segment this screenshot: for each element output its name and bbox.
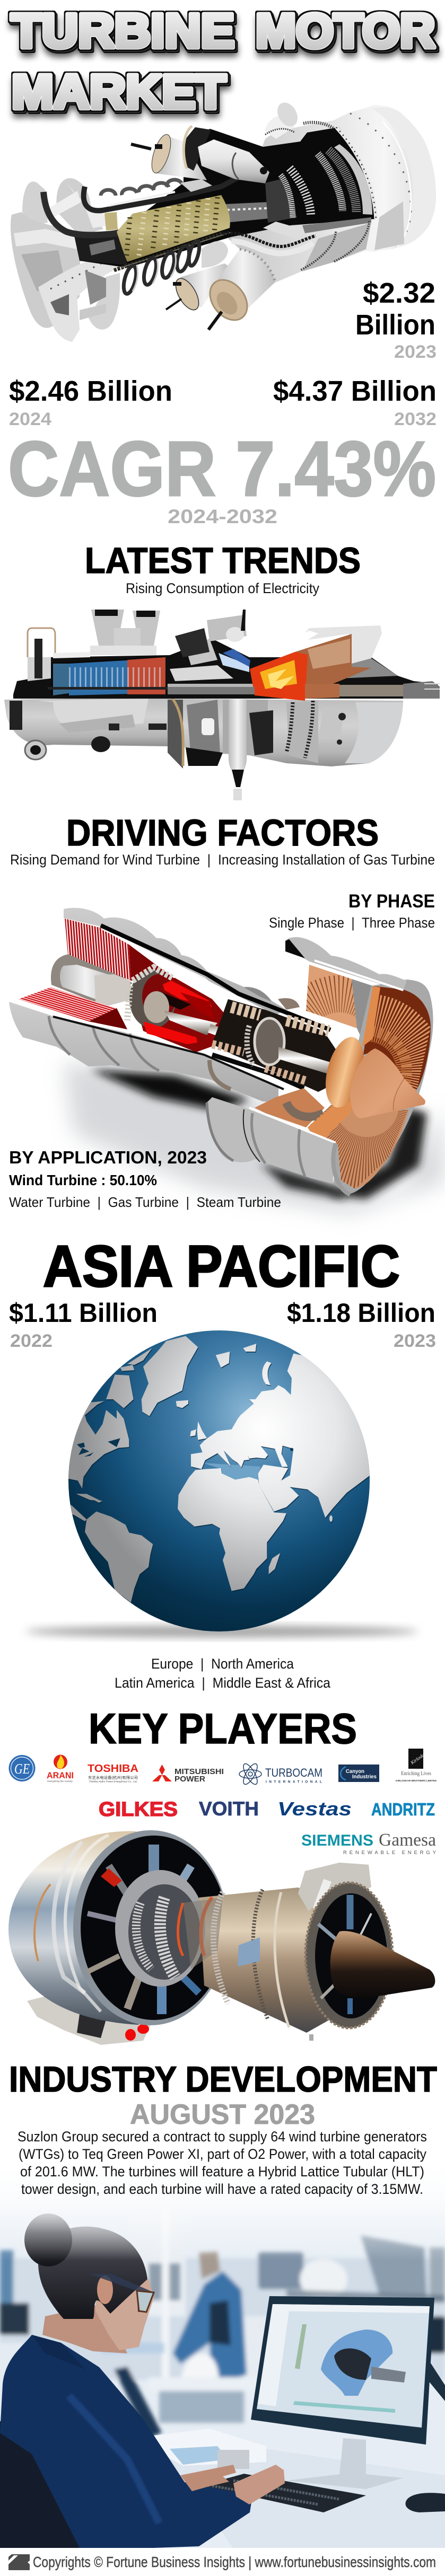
turbine stages [281, 150, 356, 218]
logo: Arani [47, 1754, 74, 1783]
icon: fortune logo [8, 2554, 30, 2570]
heading: asia pacific: ASIA PACIFIC [43, 1234, 400, 1299]
logo: Turbocam: INTERNATIONAL [266, 1780, 322, 1784]
inlet ducts [91, 610, 124, 646]
logo: Toshiba: Toshiba Hydro Power (Hangzhou) Co., Ltd. [89, 1780, 137, 1783]
right lower shell [207, 1097, 336, 1184]
top fade [0, 2165, 445, 2261]
hair [38, 2227, 147, 2319]
box and puck on desk [153, 2429, 266, 2466]
value: 2032: 2032 [394, 409, 437, 429]
bottom accessories [27, 1993, 151, 2045]
upper right shell [286, 937, 407, 991]
keyboard [202, 2474, 366, 2512]
upper combustor can [155, 136, 207, 180]
regions: Europe | North America [151, 1656, 294, 1672]
by application: Water Turbine | Gas Turbine | Steam Turbine [9, 1194, 281, 1210]
blue flame [219, 653, 249, 672]
value: 2022: $1.11 Billion [9, 1298, 158, 1328]
CAGR: 2024-2032 [168, 506, 277, 527]
value: 2024: 2024 [9, 409, 51, 429]
lower shell [9, 1002, 278, 1102]
by application [9, 1148, 281, 1210]
large combustor can [210, 249, 275, 309]
logo: Kirloskar: KIRLOSKAR BROTHERS LIMITED [396, 1779, 437, 1782]
second rotor stages [212, 999, 339, 1092]
shaft [168, 687, 255, 694]
value: 2023: 2023 [394, 1331, 436, 1351]
paragraph: tower design, and each turbine will have a rated capacity of 3.15MW. [21, 2181, 423, 2197]
small combustor can [180, 263, 230, 307]
vertical nozzle [229, 699, 247, 774]
desk [154, 2449, 445, 2548]
by phase: BY PHASE [348, 891, 435, 912]
logo: GE: GE [14, 1761, 30, 1777]
logo: Turbocam: TURBOCAM [265, 1766, 322, 1779]
value: 2023: $1.18 Billion [287, 1298, 435, 1328]
elbow pipe and flanges [265, 115, 294, 139]
lower casing [4, 697, 168, 746]
copper hub [319, 1033, 370, 1111]
by phase [269, 891, 435, 931]
logo: Canyon Industries: Canyon [346, 1769, 364, 1775]
logo: Gilkes: GILKES [99, 1798, 178, 1821]
illustration: chrome jet engine [8, 1830, 435, 2045]
fan bowl [334, 980, 433, 1195]
mouse [405, 2493, 445, 2512]
logo: GE [8, 1755, 35, 1781]
lower fan copper [255, 1088, 325, 1127]
turbine on screen [321, 2330, 406, 2396]
logo: Toshiba: TOSHIBA [88, 1763, 138, 1775]
top bracket [298, 1863, 371, 1911]
paragraph [18, 2129, 427, 2197]
logo: Mitsubishi Power: POWER [174, 1775, 205, 1784]
value: 2023: $2.32 [363, 277, 435, 309]
middle casing black bands [101, 925, 330, 1030]
value: 2023: 2023 [394, 342, 437, 362]
value: 2022: 2022 [10, 1331, 53, 1351]
globe [55, 1330, 382, 1631]
hot section [295, 634, 371, 700]
rear cylinder [51, 954, 133, 1004]
chair [0, 2421, 80, 2548]
background room [0, 2209, 445, 2548]
title: TURBINE [11, 5, 234, 58]
logo: Siemens Gamesa: SIEMENS [301, 1832, 373, 1849]
value: 2032 [273, 375, 437, 429]
ear and glasses [97, 2275, 113, 2304]
white hatched casing [297, 625, 382, 664]
logo: Kirloskar: Enriching Lives [401, 1771, 431, 1777]
value: 2023 [355, 277, 437, 362]
logo: Mitsubishi Power: MITSUBISHI [174, 1767, 224, 1776]
by application: Wind Turbine : 50.10% [9, 1172, 157, 1188]
photo: engineer at workstation [0, 2209, 445, 2548]
logo: Kirloskar: Kirloskar [409, 1750, 428, 1766]
fan ring [73, 1830, 228, 2025]
value: 2023 [287, 1298, 436, 1351]
monitor [251, 2296, 434, 2445]
red windings back [65, 919, 131, 981]
trends text: Rising Consumption of Electricity [126, 580, 319, 596]
hands [180, 2465, 236, 2491]
monitor stand [286, 2438, 403, 2489]
upper copper panel [306, 965, 357, 1028]
value: 2024 [9, 375, 172, 429]
illustration: jet engine cutaway [9, 908, 445, 1214]
compressor rotor [104, 212, 118, 231]
top accessories [175, 628, 210, 657]
logo: Mitsubishi Power [152, 1765, 224, 1784]
footer [0, 2548, 445, 2576]
heading: key players: KEY PLAYERS [89, 1705, 357, 1753]
title: MOTOR [256, 5, 435, 58]
logo: Toshiba [88, 1763, 138, 1783]
value: 2022 [9, 1298, 158, 1351]
title [11, 5, 435, 119]
rotor core [135, 978, 228, 1052]
background worker [173, 2271, 247, 2385]
title: MARKET [12, 66, 226, 119]
logo: Siemens Gamesa [301, 1830, 437, 1856]
inlet bells [56, 178, 103, 236]
dark core [77, 127, 376, 268]
nose cone [350, 1048, 425, 1118]
logo: Arani: energizing the society [47, 1780, 73, 1783]
upper dark halves [13, 639, 440, 699]
logo: Canyon Industries [338, 1765, 379, 1782]
heading: latest trends: LATEST TRENDS [85, 540, 361, 581]
by application: BY APPLICATION, 2023 [9, 1148, 207, 1167]
drum [8, 1831, 227, 2025]
right ring [306, 1883, 392, 2028]
value: 2024: $2.46 Billion [9, 375, 172, 407]
exhaust drum [228, 105, 436, 283]
compressor blue section [51, 656, 168, 695]
logo: Toshiba: 东芝水电设备(杭州)有限公司 [88, 1775, 138, 1780]
shadow under globe [25, 1626, 418, 1637]
logo: Siemens Gamesa: Gamesa [379, 1830, 436, 1850]
logo: Vestas: Vestas [277, 1798, 352, 1820]
lower casing [263, 222, 307, 240]
logo: Arani: ARANI [47, 1770, 74, 1780]
value: 2032: $4.37 Billion [273, 375, 437, 407]
date: AUGUST 2023 [130, 2099, 315, 2130]
cone [330, 1931, 435, 1998]
value: 2023: Billion [355, 309, 435, 341]
logo: Kirloskar [396, 1749, 437, 1782]
regions [115, 1656, 331, 1691]
logo: Siemens Gamesa: RENEWABLE ENERGY [343, 1850, 437, 1856]
heading: driving factors: DRIVING FACTORS [66, 812, 379, 853]
logo: Voith: VOITH [199, 1798, 259, 1820]
shell top segments [244, 987, 272, 1002]
logo: Turbocam [239, 1762, 322, 1786]
logo: Canyon Industries: Industries [352, 1774, 377, 1780]
upper casing bands [43, 192, 118, 235]
lower stage rings [121, 240, 202, 295]
neck and face [42, 2303, 127, 2353]
woman body [0, 2335, 252, 2548]
core spool [199, 1887, 339, 2033]
regions: Latin America | Middle East & Africa [115, 1675, 331, 1691]
upper shell [64, 908, 286, 1015]
illustration: gas turbine cutaway [11, 99, 436, 342]
paragraph: of 201.6 MW. The turbines will feature a Hybrid Lattice Tubular (HLT) [20, 2164, 424, 2180]
illustration: side section gas turbine [4, 610, 440, 800]
ground shadow [64, 1063, 445, 1214]
